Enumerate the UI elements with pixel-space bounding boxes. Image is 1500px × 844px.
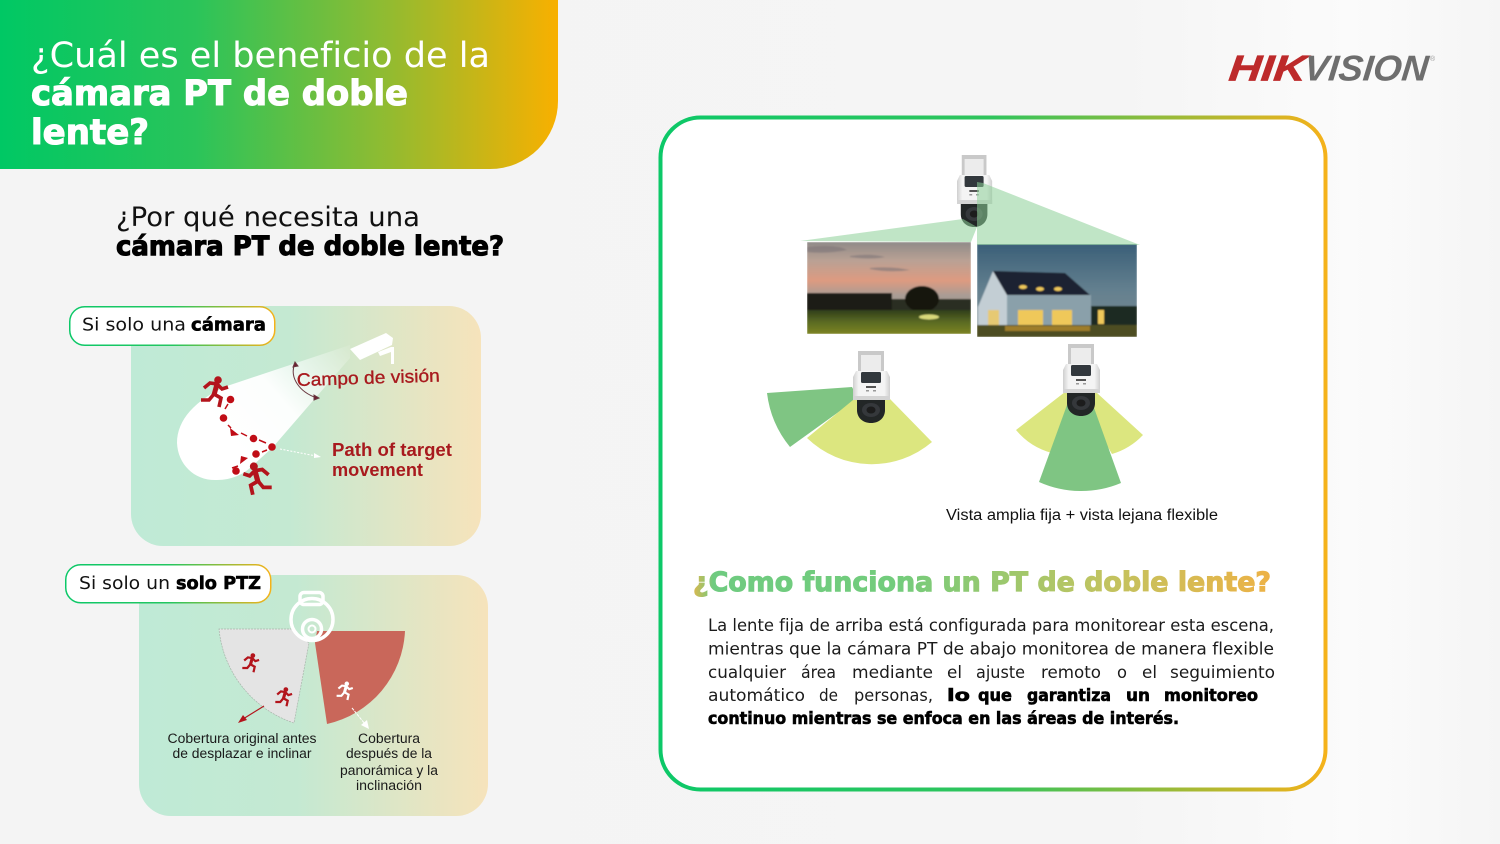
panned coverage sector xyxy=(315,631,405,724)
top camera xyxy=(957,155,992,227)
target path dots xyxy=(220,396,276,475)
fixed-lens view cone xyxy=(800,219,977,242)
icon: runner top xyxy=(201,376,228,407)
section heading: why: ¿Por qué necesita una xyxy=(116,202,420,233)
label: original coverage: de desplazar e inclinar xyxy=(172,746,312,761)
body paragraph: el xyxy=(1142,663,1157,682)
label: panned coverage: inclinación xyxy=(356,778,422,793)
header title: lente? xyxy=(31,113,149,153)
pill: single PTZ: solo PTZ xyxy=(176,573,261,594)
heading: how it works: ¿Como funciona un PT de doble lente? xyxy=(693,567,1271,598)
body paragraph: remoto xyxy=(1041,663,1101,682)
logo: Hikvision: ® xyxy=(1430,55,1436,63)
dashed pointer arrow xyxy=(280,449,321,458)
label: panned coverage: panorámica y la xyxy=(340,763,438,778)
header title: ¿Cuál es el beneficio de la xyxy=(31,36,490,76)
label: path of target movement xyxy=(332,440,452,480)
icon: runner grey 2 xyxy=(275,687,292,706)
header title xyxy=(31,36,490,153)
body paragraph: área xyxy=(801,663,836,682)
label: panned coverage: Cobertura xyxy=(358,731,420,746)
body paragraph: mediante xyxy=(852,663,933,682)
body paragraph: el xyxy=(947,663,962,682)
label: original coverage xyxy=(168,731,317,761)
label: path of target movement: movement xyxy=(332,460,423,480)
body paragraph: mientras que la cámara PT de abajo monitorea de manera flexible xyxy=(708,640,1274,658)
icon: runner white xyxy=(337,682,353,700)
body paragraph: La lente fija de arriba está configurada para monitorear esta escena, xyxy=(708,616,1274,635)
logo: Hikvision: HIK xyxy=(1227,48,1312,88)
pill: single PTZ xyxy=(66,565,271,603)
body paragraph: de xyxy=(819,686,838,705)
body paragraph: seguimiento xyxy=(1170,663,1275,682)
label: path of target movement: Path of target xyxy=(332,440,452,460)
body paragraph: cualquier xyxy=(708,663,786,682)
body paragraph emphasis: monitoreo xyxy=(1164,686,1258,705)
pill: single PTZ: Si solo un xyxy=(79,573,170,594)
original coverage sector xyxy=(219,629,309,723)
body paragraph emphasis: continuo mientras se enfoca en las áreas de interés. xyxy=(708,709,1179,728)
body paragraph emphasis: garantiza xyxy=(1027,686,1111,705)
logo: Hikvision xyxy=(1227,48,1436,88)
body paragraph: ajuste xyxy=(976,663,1025,682)
PT-lens view cone xyxy=(977,182,1140,245)
photo: house at dusk xyxy=(977,244,1137,337)
panel: single PTZ xyxy=(139,575,488,816)
image caption: Vista amplia fija + vista lejana flexible xyxy=(946,507,1218,524)
label: panned coverage: después de la xyxy=(346,746,432,761)
header title: cámara PT de doble xyxy=(31,74,408,114)
body paragraph: o xyxy=(1117,663,1127,682)
body paragraph emphasis: que xyxy=(978,686,1012,705)
panel: how it works xyxy=(660,118,1326,790)
body paragraph emphasis xyxy=(708,686,1258,728)
arrow: original coverage xyxy=(238,706,264,723)
body paragraph xyxy=(708,616,1275,705)
pill: single camera xyxy=(70,307,275,345)
pill: single camera: cámara xyxy=(191,314,266,336)
section heading: why: cámara PT de doble lente? xyxy=(116,231,504,262)
panel: single camera xyxy=(131,306,481,546)
body paragraph emphasis: un xyxy=(1126,686,1150,705)
label: original coverage: Cobertura original antes xyxy=(168,731,317,746)
arrow: panned coverage xyxy=(352,708,369,729)
body paragraph: personas, xyxy=(854,686,933,705)
icon: security camera xyxy=(350,333,394,364)
label: panned coverage xyxy=(340,731,438,793)
icon: PTZ dome xyxy=(291,592,333,640)
logo: Hikvision: VISION xyxy=(1302,48,1431,88)
lower-left camera coverage xyxy=(767,351,932,464)
photo: sunset landscape xyxy=(807,242,971,334)
angle arc xyxy=(293,362,319,400)
pill: single camera: Si solo una xyxy=(82,314,186,336)
field of view beam xyxy=(177,345,350,480)
icon: runner bottom xyxy=(243,462,272,495)
body paragraph: automático xyxy=(708,686,805,705)
body paragraph emphasis: lo xyxy=(947,686,970,705)
icon: runner grey 1 xyxy=(242,653,259,672)
lower-right camera coverage xyxy=(1016,344,1143,491)
label: field of view: Campo de visión xyxy=(296,366,440,390)
section heading: why xyxy=(116,202,504,262)
header banner xyxy=(0,0,558,169)
